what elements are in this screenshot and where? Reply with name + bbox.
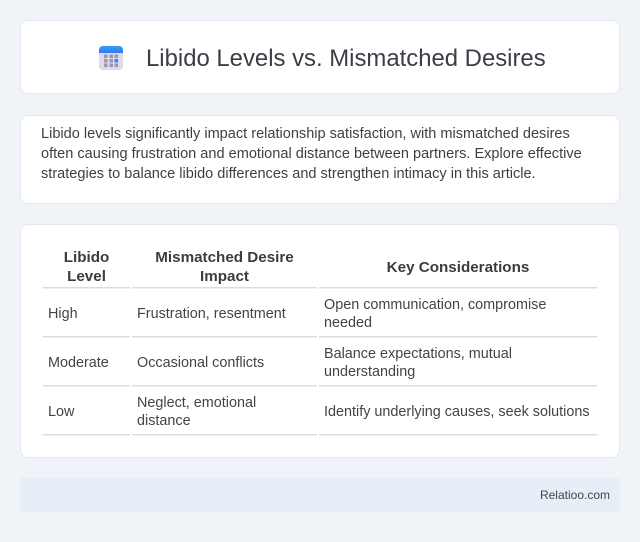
header: mismatched desire impact [155,249,294,285]
footer bar [20,478,620,512]
row: moderate: understanding [324,364,415,380]
table [43,249,597,436]
panel: intro text card [20,115,620,204]
row: high: High [48,306,78,322]
footer credit: Relatioo.com [540,488,610,502]
icon: calendar [99,46,123,70]
row: low: Low [48,404,74,420]
intro text: often causing frustration and emotional distance between partners. Explore effective [41,146,582,162]
row: low: Identify underlying causes, seek solutions [324,404,590,420]
title: Libido Levels vs. Mismatched Desires [146,45,546,72]
header: libido level: Libido [64,249,109,266]
row: moderate [48,346,512,380]
header: libido level: Level [67,268,106,285]
row: low: distance [137,413,191,429]
header: libido level [64,249,109,285]
panel: table card [20,224,620,458]
row: moderate: Occasional conflicts [137,355,264,371]
row: high: Frustration, resentment [137,306,286,322]
row: high: Open communication, compromise [324,297,546,313]
row: moderate: Moderate [48,355,109,371]
intro text: Libido levels significantly impact relationship satisfaction, with mismatched desires [41,126,570,142]
row: high [48,297,546,331]
intro text: strategies to balance libido differences and strengthen intimacy in this article. [41,166,536,182]
row: high: needed [324,315,372,331]
panel: title card [20,20,620,94]
header: mismatched desire impact: Mismatched Desire [155,249,294,266]
header: mismatched desire impact: Impact [200,268,249,285]
row: low: Neglect, emotional [137,395,256,411]
header: key considerations: Key Considerations [387,259,529,276]
row: moderate: Balance expectations, mutual [324,346,512,362]
row: low [48,395,590,429]
intro text [41,126,582,182]
